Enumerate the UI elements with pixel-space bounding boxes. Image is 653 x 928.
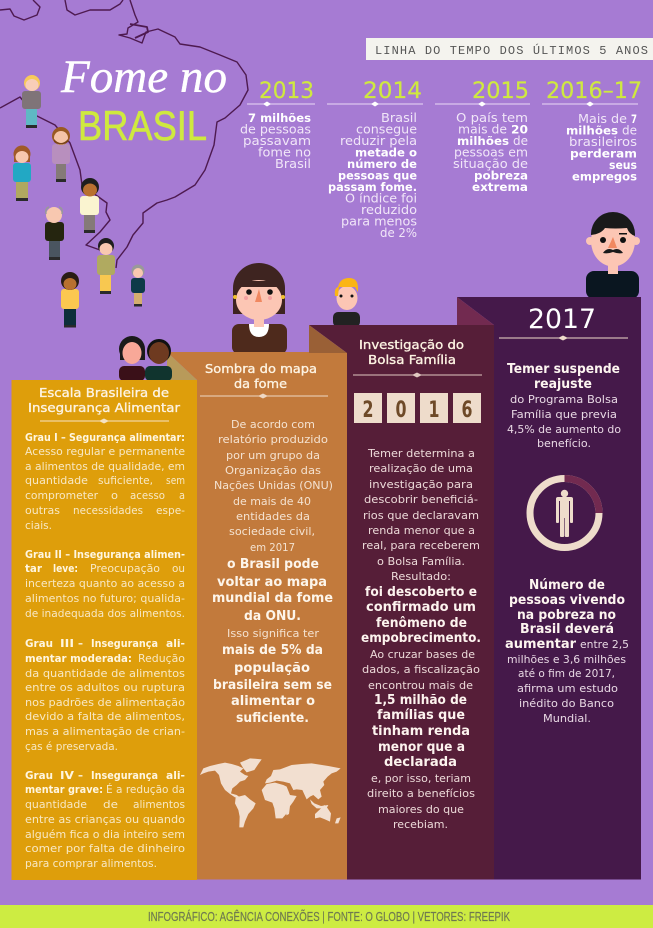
text block: investigação: tinham renda [372,723,470,739]
timeline column: 2013: passavam [243,134,311,148]
character: big woman [232,263,287,354]
text block: relatório ONU [212,419,333,726]
text block: investigação: empobrecimento. [361,630,481,646]
timeline column: 2013: 7 milhões [248,111,311,125]
text block: relatório ONU: mais de 5% da [222,643,323,658]
text block: Grau IV: mentar grave: [25,784,103,796]
character: blond boy [333,278,360,327]
text block: Temer suspende reajuste [507,362,621,450]
text block: Grau IV: É a redução da [106,783,185,796]
character: man [145,339,172,381]
text block: Grau II [25,549,185,620]
person: woman in teal [13,146,31,201]
timeline column: 2016-17: Mais de [578,112,627,126]
timeline column: 2013: 2013 [259,79,314,104]
text block: relatório ONU: sociedade civil, [229,526,315,538]
heading: escala: Escala Brasileira de [39,385,169,400]
text block: Grau II: de inadequada dos alimentos. [25,608,185,620]
text block: investigação: recebiam. [393,819,448,831]
text block: relatório ONU: alimentar o [231,694,315,709]
text block: Grau I: espe- [156,505,185,517]
timeline banner [366,38,653,60]
text block: pobreza [505,578,629,725]
text block: pobreza: pessoas vivendo [509,593,625,608]
timeline column: 2016-17: empregos [572,170,637,184]
timeline column: 2014: passam fome. [328,180,417,194]
timeline column: 2016-17: brasileiros [569,135,637,149]
text block: relatório ONU: Nações Unidas (ONU) [214,480,333,492]
timeline column: 2014: reduzir pela [340,134,417,148]
text block: pobreza: até o fim de 2017, [518,668,615,680]
map of Brazil outline [0,0,248,268]
text block: relatório ONU: De acordo com [231,419,315,431]
text block: Grau III: mas a alimentação de crian- [25,726,185,738]
text block: Grau I: a alimentos de qualidade, em [25,461,185,473]
text block: relatório ONU: brasileira sem se [213,678,332,693]
text block: investigação: declarada [384,754,457,770]
person: curly hair in yellow [61,272,79,328]
text block: Grau III: devido a falta de alimentos, [25,711,185,723]
text block: Grau IV: entre as crianças ou quando [25,814,185,826]
timeline column: 2013: Brasil [275,157,311,171]
small people group [13,75,145,328]
heading: investigação: Investigação do [359,337,464,352]
text block: pobreza: Número de [529,578,605,593]
text block: Grau II: leve: [53,563,78,575]
title: Fome no [60,51,227,103]
text block: relatório ONU: o Brasil pode [227,557,319,572]
text block: investigação: real, para receberem [362,540,480,552]
text block: Grau II: Grau II – Insegurança alimen- [25,549,185,561]
year tiles: 2016: 0 [396,398,406,423]
timeline column: 2016-17: 2016–17 [546,79,642,104]
couple illustration [119,336,172,381]
heading: sombra: Sombra do mapa [205,361,317,376]
text block: investigação: encontrou mais de [368,680,473,692]
timeline column: 2015: 2015 [472,79,529,104]
text block: investigação: o Bolsa Família. [377,556,465,568]
text block: Grau I [25,432,185,532]
timeline column: 2015: O país tem [456,111,528,125]
text block: Grau I: ciais. [25,520,52,532]
title [60,51,227,149]
text block: pobreza: afirma um estudo [517,683,618,695]
text block: investigação: fenômeno de [376,615,467,631]
text block: Grau IV: alguém fica o dia inteiro sem [25,829,185,841]
text block: relatório ONU: Isso significa ter [227,628,320,640]
text block: Grau IV [25,770,185,870]
text block: Grau I: sem [166,475,185,487]
timeline column: 2013 [240,79,315,171]
text block: relatório ONU: voltar ao mapa [217,575,327,590]
text block: Grau IV: – [78,770,83,782]
text block: investigação: e, por isso, teriam [371,773,471,785]
text block: investigação: realização de uma [369,463,473,475]
text block: pobreza: aumentar [505,637,577,652]
text block: investigação: maiores do que [378,804,464,816]
timeline column: 2016-17: milhões [566,124,618,138]
timeline column: 2016-17 [542,79,642,184]
orange panel fold [167,352,197,380]
text block: Grau II: alimentos no futuro; qualida- [25,593,185,605]
text block: Grau IV: de [103,799,118,811]
person: child [131,264,145,306]
timeline column: 2015: milhões [457,134,509,148]
text block: Grau III: Grau [25,638,53,650]
text block: investigação: famílias que [377,707,465,723]
text block: Grau I: comprometer [25,490,99,502]
text block: pobreza: milhões e 3,6 milhões [507,654,626,666]
text block: relatório ONU: da ONU. [244,609,301,624]
text block: Temer suspende reajuste: 4,5% de aumento do [507,424,621,436]
text block: Grau I: Grau I – Segurança alimentar: [25,432,185,444]
timeline column: 2013: fome no [258,146,311,160]
text block: Grau III: entre os adultos ou ruptura [25,682,185,694]
text block: Grau III: Redução [138,653,185,665]
panel: 2017 [457,297,641,880]
text block: Temer suspende reajuste: do Programa Bolsa [510,394,618,406]
text block: investigação: dados, a fiscalização [362,664,480,676]
timeline column: 2015: extrema [472,180,528,194]
icon: world map [200,758,341,827]
text block: Grau I: suficiente, [98,475,153,487]
text block: investigação: foi descoberto e [365,584,477,600]
text block: Grau II: incerteza quanto ao acesso a [25,578,185,590]
text block: Grau I: outras [25,505,60,517]
text block: pobreza: entre 2,5 [580,639,629,651]
footer credits bar [0,905,653,928]
text block: Temer suspende reajuste: Temer suspende [507,362,620,377]
timeline column: 2016-17: 7 [631,112,637,126]
timeline column: 2015: de [513,134,528,148]
text block: Grau I: necessidades [73,505,143,517]
footer credits bar: INFOGRÁFICO: AGÊNCIA CONEXÕES | FONTE: O GLOBO | VETORES: FREEPIK [148,909,511,924]
timeline column: 2014: 2014 [363,79,422,104]
heading: investigação: Bolsa Família [368,352,456,367]
timeline column: 2014: de 2% [380,226,417,240]
text block: relatório ONU: em 2017 [250,542,295,554]
title: BRASIL [78,102,207,149]
icon: donut chart with person [530,478,599,548]
heading: escala [28,385,181,424]
timeline column: 2014 [327,79,423,240]
text block: Temer suspende reajuste: benefício. [537,438,591,450]
text block: relatório ONU: Organização das [225,465,321,477]
timeline column: 2014: O índice foi [345,192,417,206]
text block: Grau II: Preocupação [90,563,160,575]
text block: relatório ONU: população [234,661,310,676]
person: bald man [45,207,64,260]
text block: Temer suspende reajuste: Família que previa [511,409,617,421]
timeline column: 2014: reduzido [361,203,417,217]
text block: Grau III: – [78,638,83,650]
timeline column: 2014: consegue [356,122,417,136]
person: woman in cream [80,178,99,233]
text block: Grau III: ali- [166,638,185,650]
timeline column: 2013: de pessoas [240,122,311,136]
timeline column: 2015: pobreza [474,168,528,182]
heading: escala: Insegurança Alimentar [28,400,181,415]
year tiles: 2016: 1 [428,398,440,423]
timeline column: 2016-17: de [622,124,637,138]
panel: Investigação do Bolsa Família [309,325,494,880]
person: man in olive [97,238,115,294]
year tiles: 2016 [354,393,481,423]
text block: Grau IV: Insegurança [91,770,158,782]
text block: relatório ONU: de mais de 40 [233,496,311,508]
text block: investigação: Ao cruzar bases de [370,649,475,661]
text block: investigação: rios que declaravam [363,510,479,522]
text block: Grau I: acesso [130,490,165,502]
text block: pobreza: inédito do Banco [519,698,614,710]
text block: investigação: 1,5 milhão de [374,692,467,708]
timeline column: 2014: pessoas que [338,168,417,182]
text block: Grau III: mentar moderada: [25,653,132,665]
year tiles: 2016: 2 [362,398,374,423]
text block: relatório ONU: suficiente. [236,711,309,726]
text block: investigação: direito a benefícios [367,788,475,800]
text block: Grau I: o [111,490,118,502]
text block: Grau III: III [60,638,74,650]
text block: Grau I: a [179,490,185,502]
text block: Grau III: ças é preservada. [25,741,118,753]
text block: Grau III: nos padrões de alimentação [25,697,185,709]
timeline column: 2014: metade o [355,146,417,160]
text block: pobreza: Mundial. [543,713,591,725]
timeline column: 2016-17: perderam [570,146,637,160]
timeline column: 2014: Brasil [381,111,417,125]
person: bearded [52,127,70,182]
timeline column: 2014: número de [347,157,417,171]
text block: relatório ONU: mundial da fome [212,591,333,606]
timeline column: 2015: 20 [511,122,528,136]
timeline banner: LINHA DO TEMPO DOS ÚLTIMOS 5 ANOS [375,43,648,58]
text block: Grau IV: alimentos [133,799,185,811]
panel: Escala Brasileira de Insegurança Alimentar [12,380,197,880]
character: woman [119,336,145,381]
text block: Grau III: da quantidade de alimentos [25,668,185,680]
heading: 2017 [499,304,628,340]
timeline column: 2015: situação de [453,157,528,171]
person: blond [22,75,41,128]
text block: relatório ONU: entidades da [236,511,310,523]
text block: Grau IV: Grau [25,770,53,782]
text block: investigação: Resultado: [391,571,451,583]
text block: Temer suspende reajuste: reajuste [534,377,592,392]
heading: investigação [353,337,482,378]
text block: Grau II: tar [25,563,43,575]
text block: investigação [361,448,481,831]
text block: investigação: menor que a [378,739,465,755]
text block: Grau I: quantidade [25,475,88,487]
text block: relatório ONU: relatório produzido [218,434,328,446]
text block: investigação: confirmado um [366,599,476,615]
heading: 2017: 2017 [528,304,596,335]
text block: pobreza: Brasil deverá [520,622,614,637]
timeline column: 2015: pessoas em [454,146,528,160]
timeline column: 2014: para menos [341,214,417,228]
character: man with moustache [586,212,640,299]
text block: Grau II: ou [172,563,185,575]
text block: Grau IV: quantidade [25,799,87,811]
text block: pobreza: na pobreza no [517,608,616,623]
text block: Grau IV: ali- [166,770,185,782]
text block: Grau III: Insegurança [91,638,158,650]
timeline column: 2015 [435,79,530,194]
text block: Grau III [25,638,185,753]
heading: sombra: da fome [234,376,287,391]
heading: sombra [200,361,328,398]
timeline column: 2015: mais de [458,122,507,136]
text block: investigação: descobrir beneficiá- [364,494,478,506]
year tiles: 2016: 6 [462,398,472,423]
text block: investigação: renda menor que a [368,525,475,537]
panel: Sombra do mapa da fome [197,352,347,880]
text block: relatório ONU: por um grupo da [226,450,320,462]
text block: investigação: Temer determina a [367,448,475,460]
text block: Grau IV: comer por falta de dinheiro [25,843,185,855]
text block: investigação: investigação para [369,479,473,491]
text block: Grau IV: IV [60,770,75,782]
text block: Grau IV: para comprar alimentos. [25,858,157,870]
text block: Grau I: Acesso regular e permanente [25,446,185,458]
timeline column: 2016-17: seus [609,158,637,172]
